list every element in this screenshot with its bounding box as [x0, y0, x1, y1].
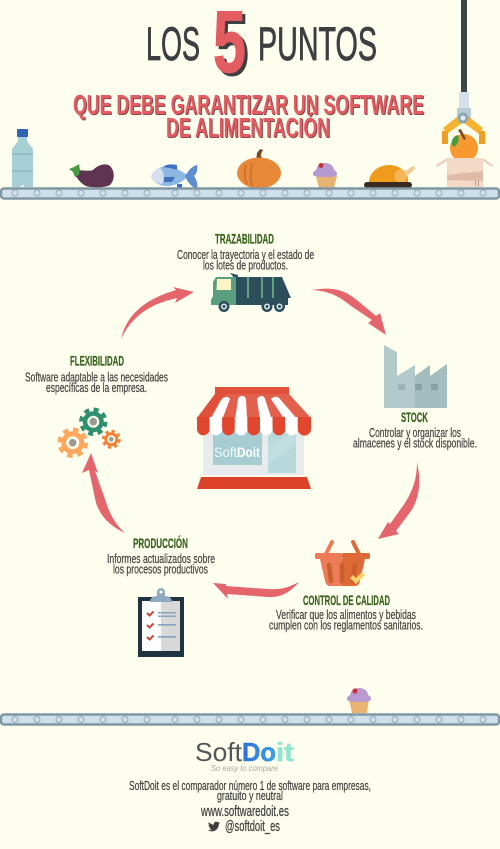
logo: SoftDoit: Do [242, 737, 276, 767]
icon: central store: Doit [237, 444, 260, 460]
text block: trazabilidad [177, 230, 314, 272]
text block: produccion [107, 534, 215, 576]
text block: stock [353, 409, 477, 450]
arrow: produccion to flexibilidad [82, 453, 125, 533]
arrow: trazabilidad to stock [312, 289, 386, 335]
logo: SoftDoit: So easy to compare [211, 763, 278, 773]
icon: shopping basket [315, 542, 370, 586]
conveyor belt: bottom [1, 714, 499, 724]
text block: control de calidad: CONTROL DE CALIDAD [303, 592, 390, 608]
title: PUNTOS [258, 17, 377, 70]
icon: gears [60, 410, 119, 456]
text block: trazabilidad: Conocer la trayectoria y el estado de [177, 247, 314, 262]
text block: produccion: los procesos productivos [113, 562, 208, 576]
icon: robotic arm with orange and box [436, 0, 493, 187]
text block: stock: STOCK [401, 409, 428, 425]
icon: twitter bird [208, 822, 220, 831]
icon: cupcake [313, 163, 337, 188]
icon: clipboard [138, 588, 184, 657]
icon: roast turkey [364, 165, 416, 188]
icon: eggplant [69, 164, 114, 187]
icon: water bottle [12, 129, 33, 187]
footer text: www.softwaredoit.es [200, 803, 289, 820]
footer text: @softdoit_es [225, 818, 280, 835]
subtitle: DE ALIMENTACIÓN [167, 113, 331, 144]
text block: produccion: PRODUCCIÓN [133, 534, 188, 551]
icon: cupcake on bottom belt [347, 688, 371, 713]
logo: SoftDoit: it [276, 737, 294, 767]
text block: trazabilidad: TRAZABILIDAD [215, 230, 274, 246]
arrow: flexibilidad to trazabilidad [121, 287, 194, 339]
text block: control de calidad: Verificar que los alimentos y bebidas [276, 607, 416, 622]
icon: factory [384, 345, 447, 408]
footer text: SoftDoit es el comparador número 1 de software para empresas, [129, 778, 371, 793]
arrow: stock to control de calidad [378, 462, 419, 539]
text block: flexibilidad: específicas de la empresa. [46, 380, 147, 395]
icon: truck [211, 273, 291, 312]
text block: control de calidad: cumplen con los reglamentos sanitarios. [269, 618, 423, 632]
text block: produccion: Informes actualizados sobre [107, 551, 215, 566]
icon: fish [151, 164, 197, 189]
text block: control de calidad [269, 592, 423, 632]
icon: central store: Soft [214, 444, 237, 460]
subtitle: DE ALIMENTACIÓN [166, 112, 330, 143]
icon: central store [197, 387, 311, 489]
text block: flexibilidad [25, 352, 168, 395]
text block: flexibilidad: FLEXIBILIDAD [70, 352, 124, 368]
icon: pumpkin [237, 149, 281, 188]
arrow: control de calidad to produccion [213, 582, 299, 599]
text block: trazabilidad: los lotes de productos. [203, 258, 288, 272]
title: LOS [146, 17, 200, 70]
subtitle [73, 89, 425, 144]
footer text: gratuito y neutral [217, 788, 283, 803]
text block: flexibilidad: Software adaptable a las necesidades [25, 370, 168, 384]
conveyor belt: top [1, 188, 499, 198]
logo: SoftDoit: Soft [195, 737, 243, 767]
logo: SoftDoit [195, 737, 294, 773]
footer text [129, 778, 371, 835]
title [146, 0, 377, 94]
